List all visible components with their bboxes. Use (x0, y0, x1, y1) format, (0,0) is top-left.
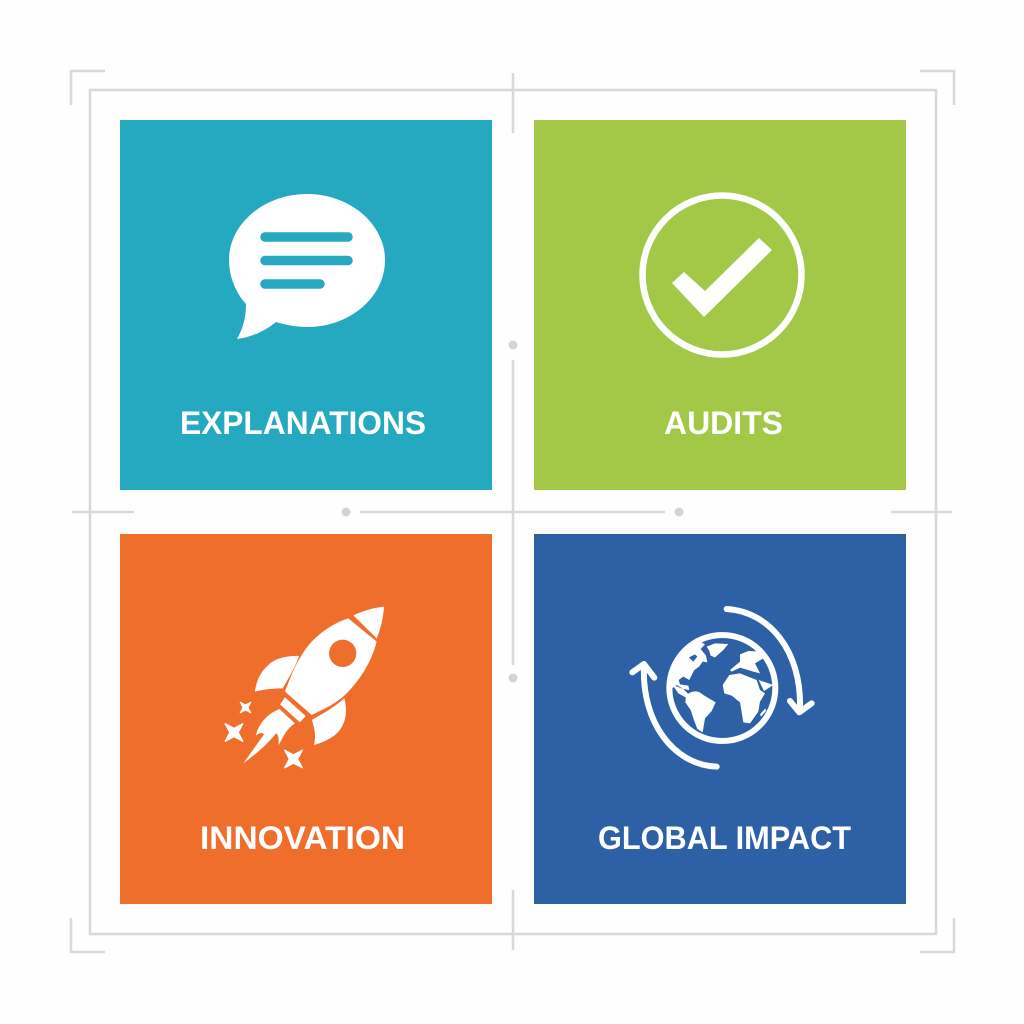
icon: check mark in circle (642, 196, 802, 354)
panel: explanations (120, 120, 492, 490)
panel: innovation (120, 534, 492, 904)
panel: audits (534, 120, 906, 490)
icon: rocket (216, 607, 384, 777)
panel: global impact (534, 534, 906, 904)
heading: explanations: EXPLANATIONS (180, 405, 426, 441)
icon: globe with rotating arrows (632, 609, 812, 767)
heading: audits: AUDITS (664, 405, 783, 441)
heading: innovation: INNOVATION (200, 820, 405, 856)
icon: speech bubble (229, 194, 385, 339)
heading: global impact: GLOBAL IMPACT (598, 820, 851, 856)
